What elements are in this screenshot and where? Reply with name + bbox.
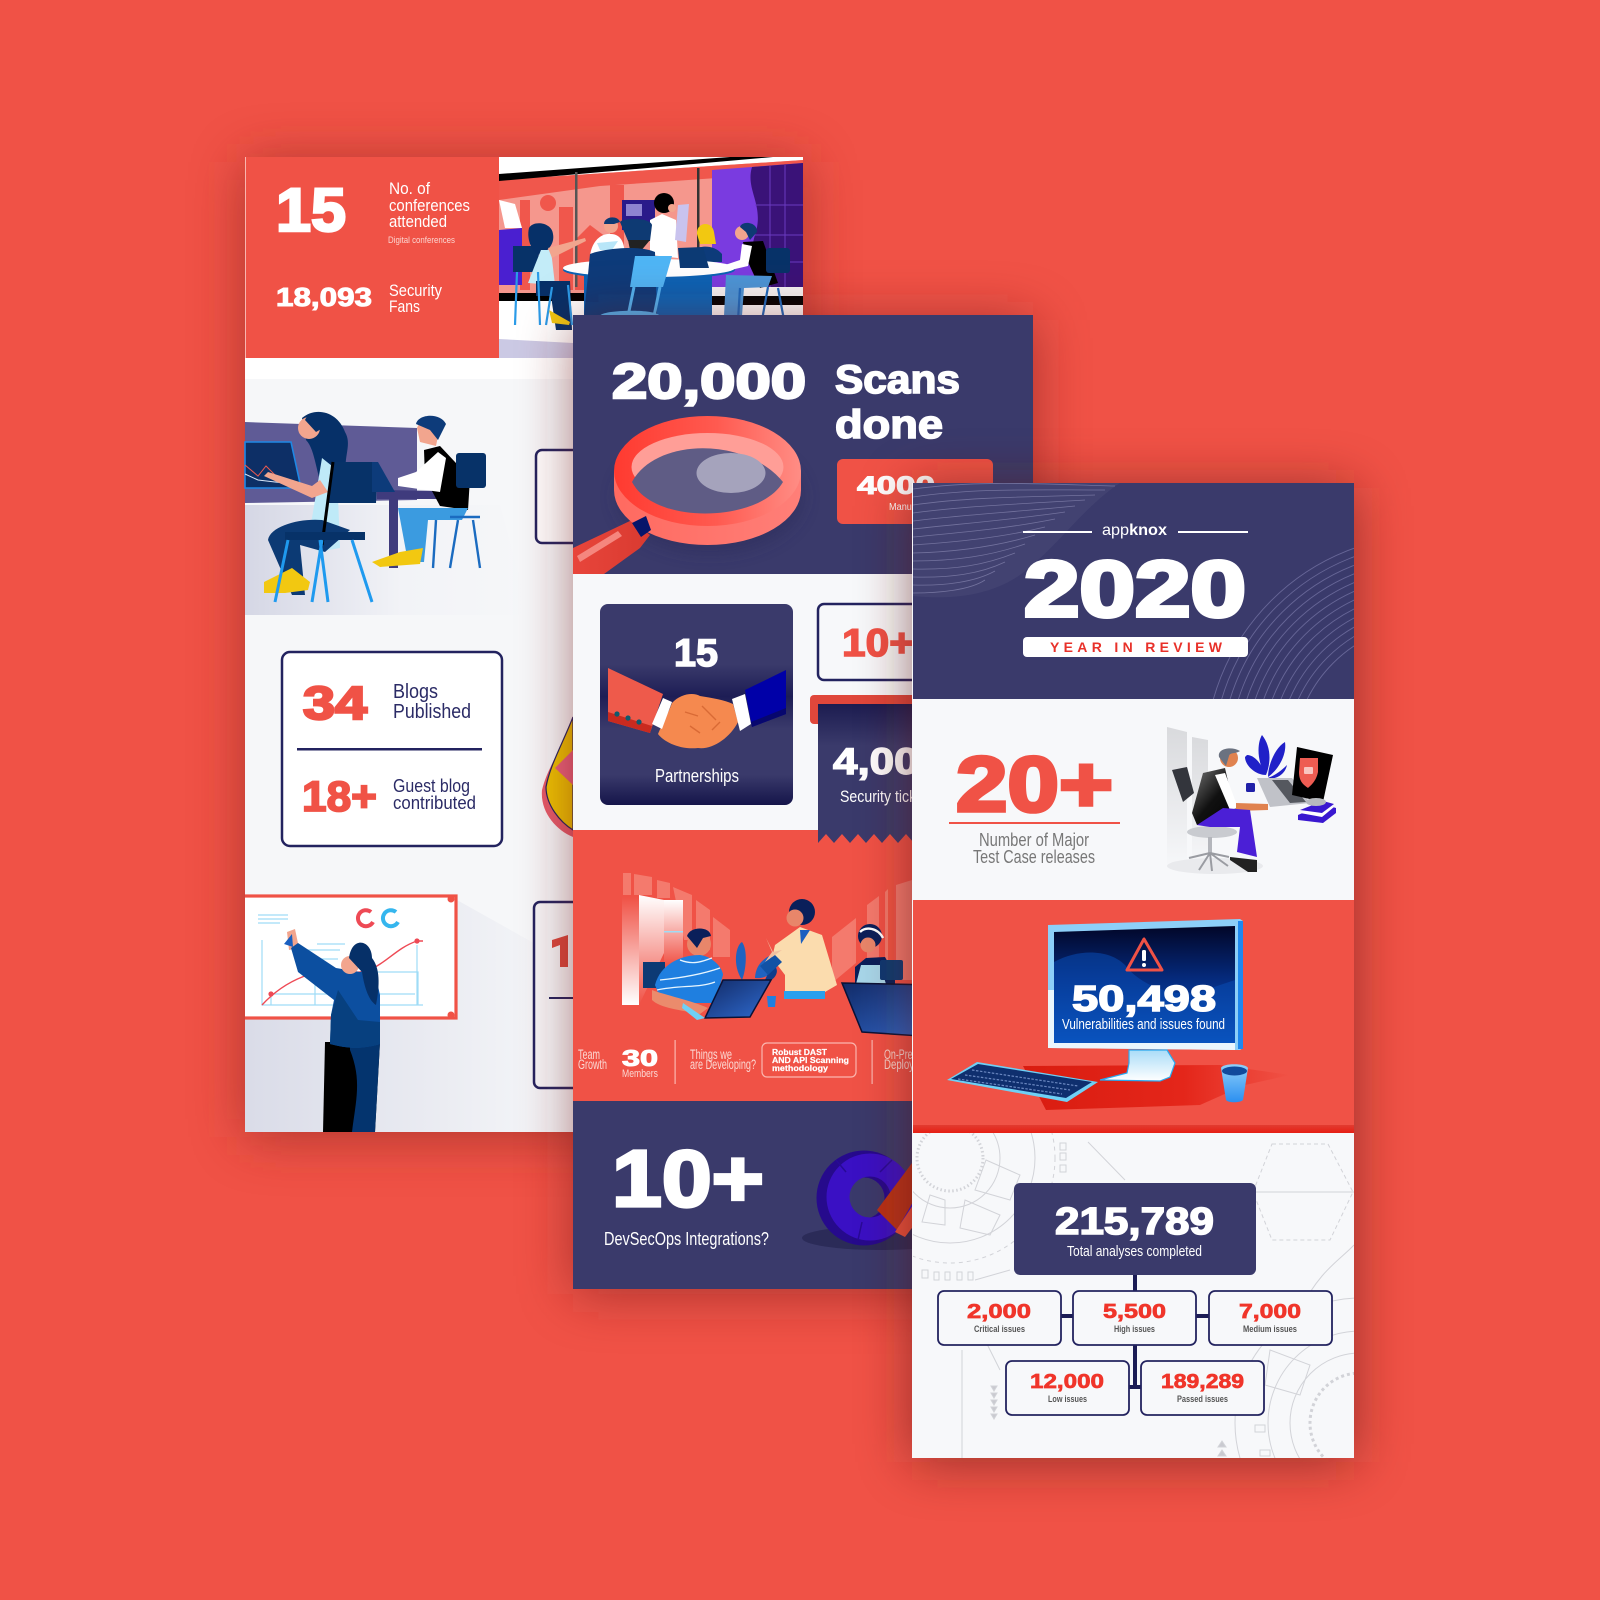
- card: critical issues: [938, 1291, 1061, 1345]
- icon: monitor: 50,498: [1072, 978, 1216, 1019]
- card: critical issues: 2,000: [967, 1301, 1031, 1323]
- stats block: conferences and fans: conferences: [389, 196, 470, 215]
- icon: magnifying glass: [573, 416, 803, 574]
- laptop on desk: [372, 462, 395, 492]
- panel: scans and team sheet: [573, 315, 1033, 1294]
- card: passed issues: Passed issues: [1177, 1394, 1228, 1405]
- card: low issues: 12,000: [1030, 1371, 1104, 1393]
- card: 10+ fragment: [818, 604, 938, 680]
- section: 20+ test case releases: 20+: [956, 740, 1113, 828]
- circuit pattern background: [913, 1133, 1354, 1458]
- stats row: [578, 1040, 920, 1084]
- person back with hat: [584, 219, 672, 316]
- blonde person: [696, 224, 722, 262]
- stat card: blogs published: 18+: [302, 773, 377, 821]
- woman at monitor: [264, 412, 350, 595]
- stat card: blogs published: Guest blog: [393, 776, 470, 796]
- laptop on table: [678, 247, 709, 268]
- card: passed issues: [1141, 1361, 1264, 1415]
- card: total analyses completed: 215,789: [1055, 1201, 1214, 1243]
- floor and whiteboard scene: [240, 896, 594, 1132]
- section: devsecops integrations: 10+: [612, 1134, 764, 1223]
- card: 15 partnerships: Partnerships: [655, 766, 739, 786]
- badge: yellow shield fragment: [542, 717, 573, 837]
- woman standing: [760, 899, 837, 999]
- desk shadow: [1023, 1065, 1290, 1110]
- laptop right: [842, 983, 935, 1037]
- stats row: methodology: [772, 1064, 829, 1073]
- person standing: [650, 193, 689, 258]
- stats block: conferences and fans: No. of: [389, 179, 430, 198]
- monitor with line chart: [245, 442, 301, 488]
- plant: [1245, 735, 1287, 778]
- card: high issues: [1073, 1291, 1196, 1345]
- section: 20+ test case releases: [913, 699, 1354, 900]
- section: scans done: [573, 315, 1033, 574]
- stats block: conferences and fans: [245, 157, 499, 358]
- section: scans done: 20,000: [612, 355, 806, 409]
- icon: circular arrows: [802, 1160, 958, 1250]
- man at desk: [372, 416, 486, 568]
- section: vulnerabilities monitor: [913, 900, 1354, 1133]
- card: critical issues: Critical issues: [974, 1324, 1025, 1335]
- stats row: Members: [622, 1068, 658, 1080]
- card: medium issues: 7,000: [1239, 1301, 1301, 1323]
- header: 2020 year in review: [913, 483, 1354, 699]
- card: low issues: Low issues: [1048, 1394, 1087, 1405]
- person center white shirt: [590, 217, 624, 258]
- section: devsecops integrations: [573, 1101, 1033, 1289]
- card: security tickets ticket: [810, 695, 943, 843]
- stats block: conferences and fans: Security: [389, 281, 442, 300]
- stat card: blogs published: [282, 652, 502, 846]
- card: medium issues: [1209, 1291, 1332, 1345]
- woman right: [855, 924, 903, 984]
- stat card: blogs published: contributed: [393, 793, 476, 813]
- icon: handshake: [608, 668, 786, 748]
- stats row: Robust DAST: [772, 1048, 827, 1057]
- stat card: blogs published: Published: [393, 701, 471, 723]
- warning triangle: [1127, 939, 1162, 970]
- person left seated: [513, 223, 586, 330]
- person right with vest: [722, 223, 790, 320]
- badge: 4000 manual: 4000: [857, 472, 935, 500]
- stats row: are Developing?: [690, 1057, 756, 1072]
- card: total analyses completed: Total analyses completed: [1067, 1243, 1202, 1260]
- card: medium issues: Medium issues: [1243, 1324, 1297, 1335]
- books: [1298, 798, 1336, 823]
- illustration: man at laptop: [1167, 727, 1336, 874]
- stats block: conferences and fans: Fans: [389, 297, 420, 316]
- card: security tickets ticket: 4,000: [833, 741, 943, 782]
- banner: year in review: YEAR IN REVIEW: [1050, 639, 1223, 655]
- icon: cup: [1221, 1064, 1248, 1102]
- stats row: Deploy: [884, 1057, 914, 1072]
- card: total analyses completed: [1014, 1183, 1256, 1275]
- stat card: blogs published: 34: [303, 677, 368, 729]
- card: 15 partnerships: 15: [674, 632, 718, 675]
- section: 20+ test case releases: Number of Major: [979, 830, 1089, 850]
- card: low issues: [1006, 1361, 1129, 1415]
- badge: 4000 manual: [837, 459, 993, 524]
- section: scans done: Scans: [835, 358, 960, 402]
- stats row: 30: [622, 1045, 658, 1071]
- section: devsecops integrations: DevSecOps Integrations?: [604, 1229, 769, 1249]
- panel: conferences and blogs sheet: [240, 157, 803, 1137]
- illustration: two people at desk with monitor: [245, 412, 530, 615]
- stats block: conferences and fans: attended: [389, 212, 447, 231]
- card: passed issues: 189,289: [1161, 1371, 1244, 1393]
- stats row: Growth: [578, 1057, 607, 1072]
- whiteboard with chart: [240, 896, 456, 1018]
- plant: [736, 942, 782, 981]
- cup: [767, 996, 776, 1007]
- table: [563, 259, 735, 316]
- laptop with shield: [1257, 747, 1333, 807]
- laptop left: [682, 980, 771, 1020]
- badge: 4000 manual: Manual: [889, 502, 919, 513]
- illustration: team in corridor: [622, 873, 935, 1037]
- decorative hidden card fragment: [532, 900, 573, 1090]
- header: 2020 year in review: 2020: [1024, 544, 1246, 633]
- stats row: Team: [578, 1047, 600, 1062]
- card: 10+ fragment: 10+: [842, 622, 914, 665]
- logo: appknox: appknox: [1102, 522, 1167, 539]
- icon: monitor: Vulnerabilities and issues found: [1062, 1016, 1225, 1033]
- section: team growth: [573, 830, 1033, 1101]
- flow connectors: [1061, 1275, 1209, 1389]
- woman chair: [275, 462, 378, 602]
- section: 20+ test case releases: Test Case releases: [973, 847, 1095, 867]
- decorative hidden card fragment: [536, 450, 596, 543]
- stats row: AND API Scanning: [772, 1056, 849, 1065]
- stats block: conferences and fans: 15: [276, 176, 346, 244]
- card: security tickets ticket: Security tickets: [840, 787, 935, 806]
- man with striped shirt: [652, 928, 723, 1014]
- icon: monitor: [1048, 919, 1243, 1081]
- section: total analyses flow: [913, 1133, 1354, 1458]
- card: 15 partnerships: [600, 604, 793, 805]
- stats row: Things we: [690, 1047, 732, 1062]
- woman drawing on whiteboard: [284, 929, 380, 1132]
- card: high issues: 5,500: [1103, 1301, 1166, 1323]
- stats block: conferences and fans: Digital conferences: [388, 235, 455, 246]
- section: scans done: done: [835, 403, 943, 447]
- illustration: team meeting round table: [499, 157, 803, 358]
- stats row: On-Prem: [884, 1047, 920, 1062]
- stat card: blogs published: Blogs: [393, 681, 438, 703]
- card: high issues: High issues: [1114, 1324, 1155, 1335]
- icon: keyboard: [947, 1062, 1098, 1102]
- banner: year in review: [1023, 637, 1248, 657]
- stats block: conferences and fans: 18,093: [276, 282, 372, 312]
- panel: 2020 year in review sheet: [871, 453, 1389, 1497]
